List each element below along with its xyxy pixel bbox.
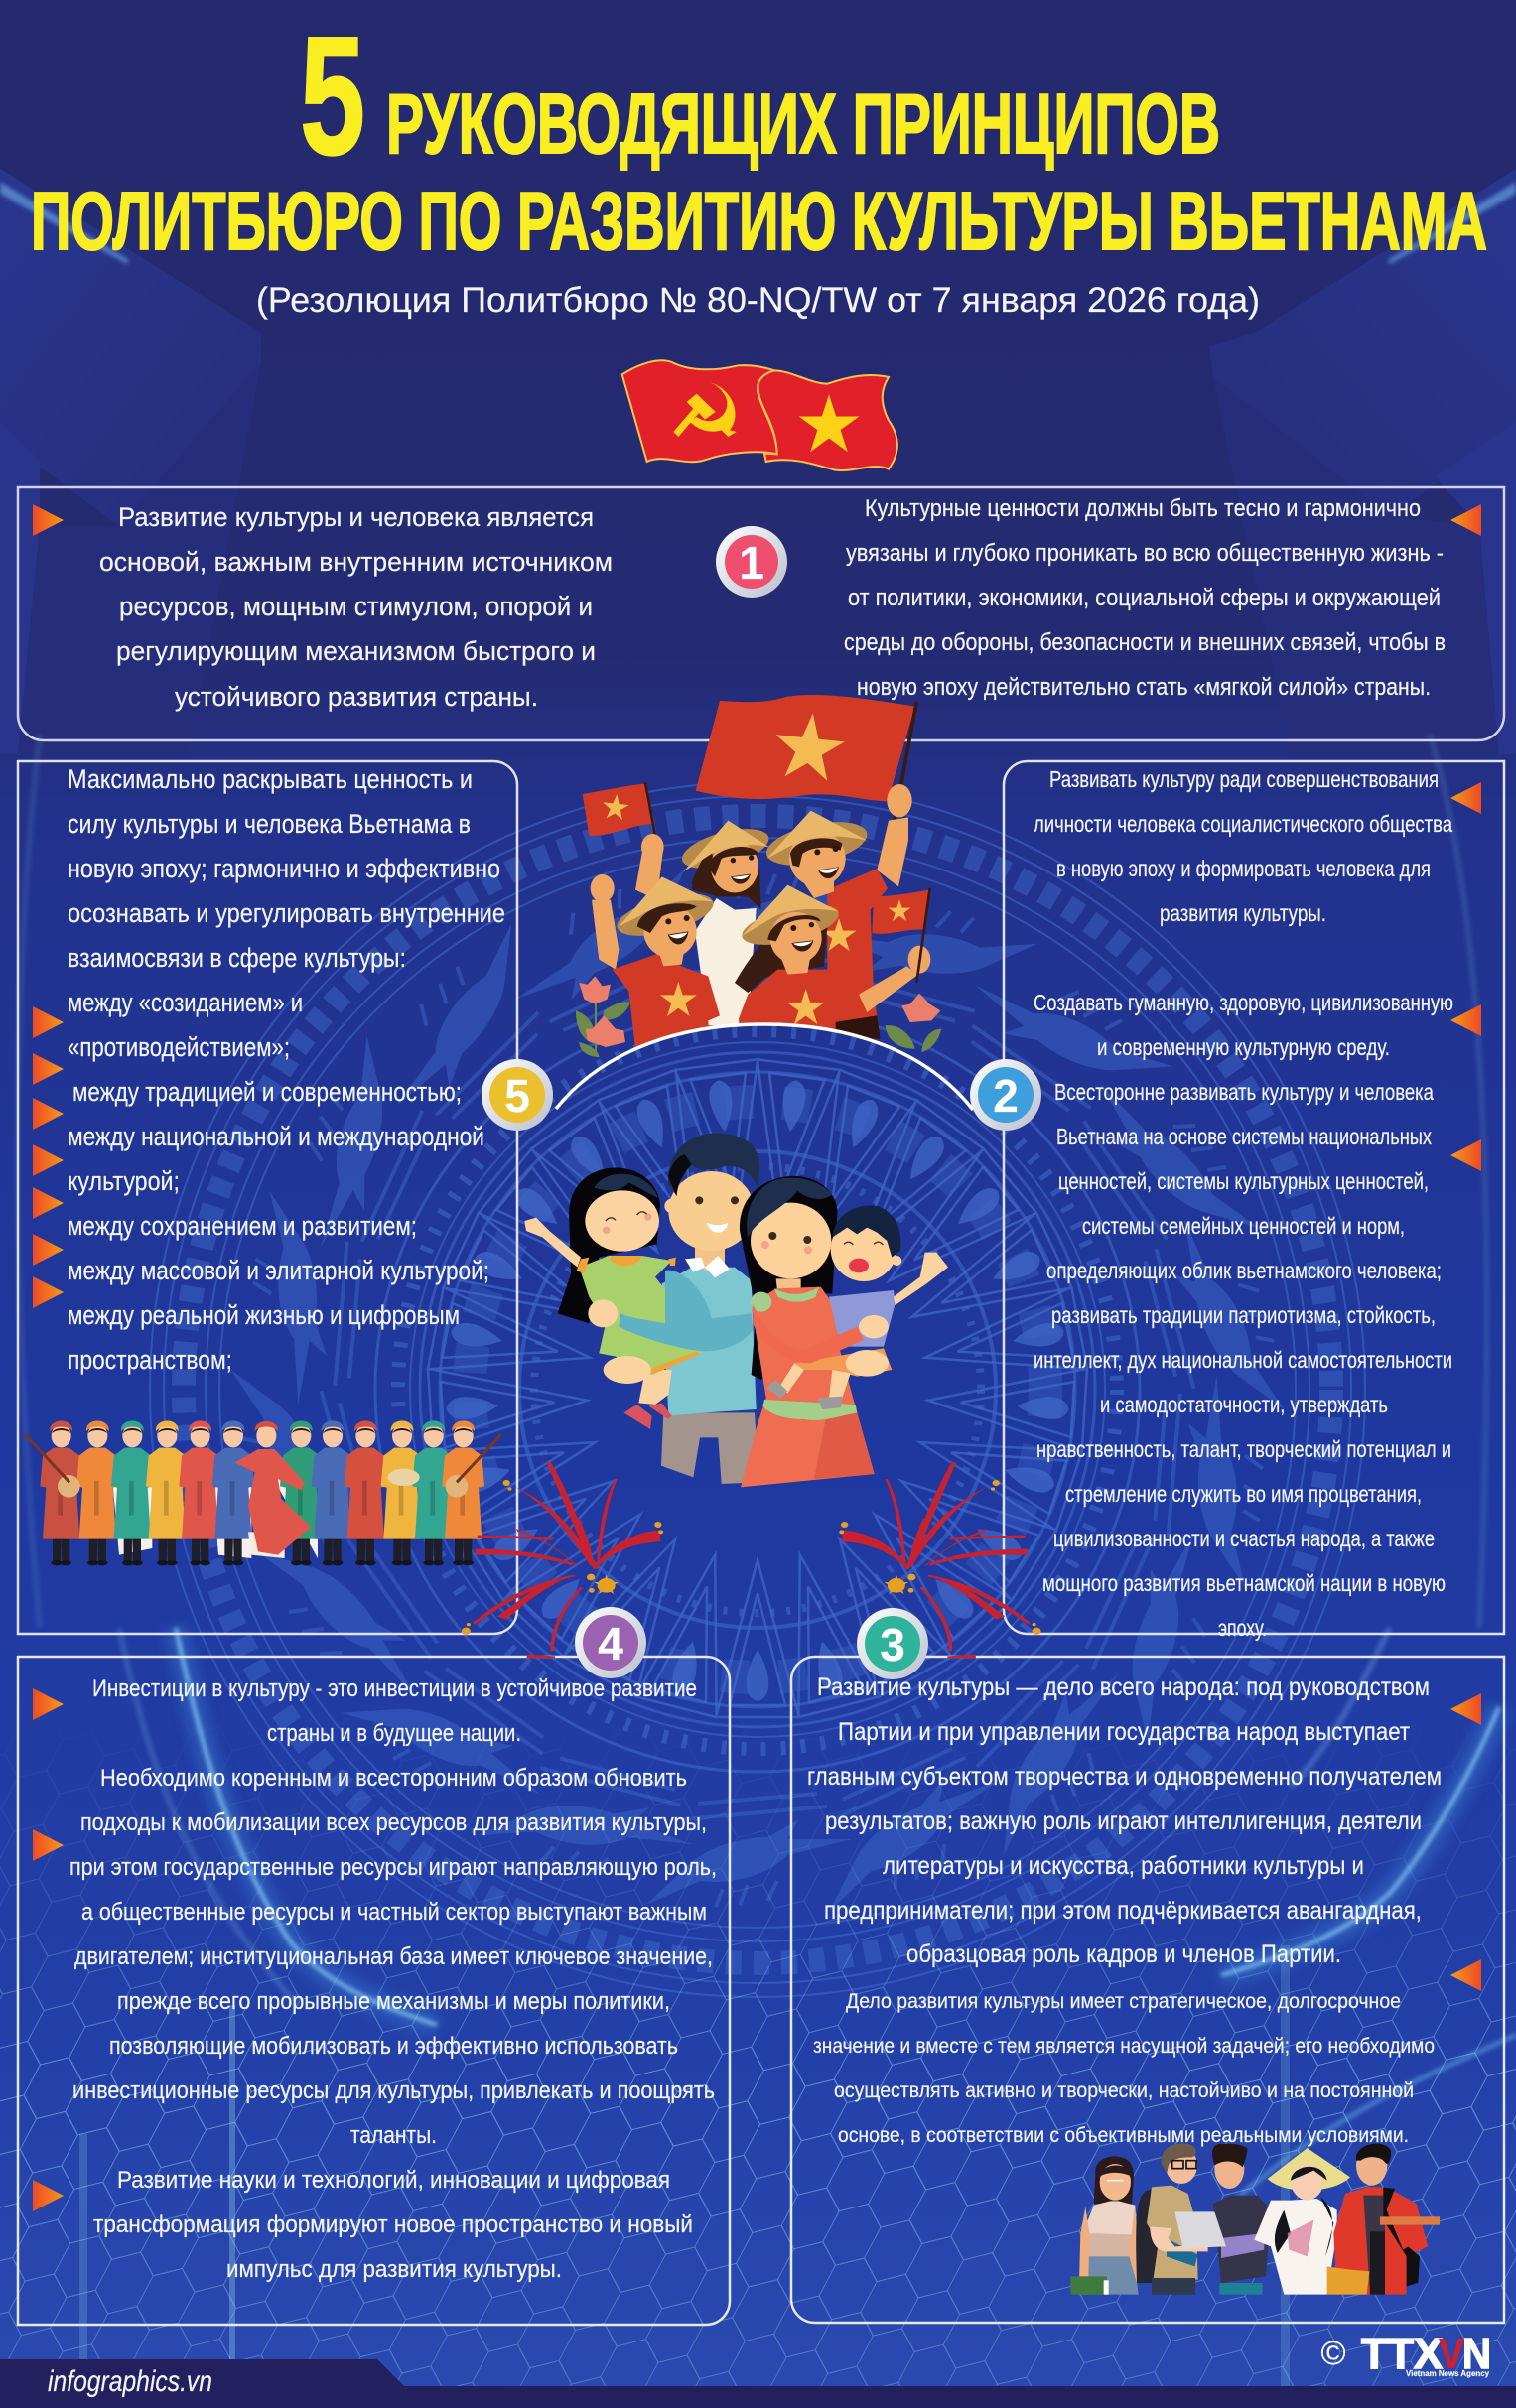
text: panel 5: новую эпоху; гармонично и эффективно bbox=[68, 854, 500, 883]
badge 2 bbox=[970, 1059, 1041, 1131]
text: panel 5: между реальной жизнью и цифровым bbox=[68, 1300, 460, 1330]
text: panel 4: а общественные ресурсы и частный сектор выступают важным bbox=[81, 1899, 707, 1926]
text: panel 5: между традицией и современностью; bbox=[72, 1077, 462, 1107]
text: panel 2 bbox=[1034, 766, 1453, 1641]
icon: small flag right bbox=[872, 888, 930, 983]
badge 4: 4 bbox=[598, 1618, 623, 1670]
text: panel 1 left: устойчивого развития страны. bbox=[175, 682, 538, 712]
panel 2: develop culture for human perfection bbox=[1004, 761, 1504, 1641]
text: panel 5 bbox=[68, 764, 505, 1375]
text: panel 5: между массовой и элитарной культурой; bbox=[68, 1256, 489, 1285]
text: panel 2: и современную культурную среду. bbox=[1097, 1034, 1390, 1060]
icon: arrow bullets bbox=[33, 1006, 64, 1308]
text: panel 2: Всесторонне развивать культуру и человека bbox=[1054, 1079, 1434, 1105]
source label: infographics.vn bbox=[48, 2365, 212, 2398]
text: panel 3 main: Развитие культуры — дело всего народа: под руководством bbox=[817, 1673, 1430, 1701]
text: panel 4: импульс для развития культуры. bbox=[226, 2256, 562, 2283]
illustration: patriotic group with flags bbox=[576, 695, 941, 1057]
panel 3: culture is the work of all people bbox=[791, 1657, 1504, 2323]
icon: arrow bullets bbox=[1450, 1693, 1481, 1991]
badge 5: 5 bbox=[504, 1070, 530, 1122]
figure: man with hat bbox=[762, 811, 888, 1039]
figure: father's arm bbox=[588, 1271, 753, 1384]
badge 2: 2 bbox=[993, 1070, 1019, 1122]
subtitle: (Резолюция Политбюро № 80-NQ/TW от 7 января 2026 года) bbox=[256, 281, 1260, 320]
panel 4: investment in culture bbox=[18, 1657, 730, 2325]
decorative Dong Son drum bbox=[150, 782, 1365, 1997]
panel 1: culture and people as foundation bbox=[18, 487, 1504, 740]
illustration: performers in traditional dress bbox=[25, 1420, 501, 1565]
logo: TTXVN: Vietnam News Agency bbox=[1406, 2368, 1489, 2378]
text: panel 4: позволяющие мобилизовать и эффективно использовать bbox=[109, 2033, 678, 2060]
illustration: fireworks bbox=[462, 1462, 1041, 1658]
icon: small flag left bbox=[583, 782, 661, 867]
text: panel 2: в новую эпоху и формировать человека для bbox=[1056, 856, 1431, 881]
text: panel 5: между сохранением и развитием; bbox=[68, 1211, 417, 1241]
text: panel 1 right bbox=[844, 495, 1446, 701]
text: panel 2: эпоху. bbox=[1218, 1615, 1267, 1641]
title bbox=[31, 2, 1487, 267]
text: panel 5: между «созиданием» и bbox=[68, 988, 303, 1017]
illustration: young people group bbox=[1070, 2143, 1440, 2295]
icon: arrow bullets bbox=[33, 1688, 64, 2211]
figure: father bbox=[661, 1134, 759, 1484]
text: panel 5: осознавать и урегулировать внутренние bbox=[68, 898, 505, 928]
text: panel 1 right: увязаны и глубоко проникать во всю общественную жизнь - bbox=[846, 540, 1444, 567]
badge 5 bbox=[482, 1059, 553, 1131]
logo: TTXVN: TTX bbox=[1361, 2330, 1443, 2378]
figure: daughter bbox=[524, 1168, 702, 1429]
figure: boy with hat bbox=[591, 874, 720, 1049]
text: panel 3 main: литературы и искусства, работники культуры и bbox=[883, 1852, 1364, 1880]
badge 4 bbox=[575, 1607, 646, 1678]
text: panel 3 secondary: осуществлять активно и творчески, настойчиво и на постоянной bbox=[834, 2078, 1414, 2102]
text: panel 1 right: среды до обороны, безопасности и внешних связей, чтобы в bbox=[844, 629, 1446, 656]
badge 1 bbox=[716, 526, 787, 598]
illustration: family bbox=[524, 1134, 948, 1487]
text: panel 1 left: ресурсов, мощным стимулом, опорой и bbox=[119, 592, 593, 621]
text: panel 5: «противодействием»; bbox=[68, 1032, 290, 1062]
icon: large flag bbox=[696, 695, 916, 834]
title: 5 bbox=[300, 2, 365, 191]
text: panel 2: ценностей, системы культурных ценностей, bbox=[1058, 1168, 1429, 1194]
text: panel 1 right: Культурные ценности должны быть тесно и гармонично bbox=[865, 495, 1421, 522]
text: panel 5: Максимально раскрывать ценность и bbox=[68, 764, 473, 794]
text: panel 4: Инвестиции в культуру - это инвестиции в устойчивое развитие bbox=[92, 1675, 697, 1702]
text: panel 4: таланты. bbox=[350, 2122, 437, 2149]
figure: son bbox=[753, 1205, 948, 1409]
text: panel 1 left: Развитие культуры и человека является bbox=[118, 502, 594, 532]
icon: lotus flowers bbox=[576, 976, 941, 1057]
badge 1: 1 bbox=[739, 537, 764, 589]
text: panel 3 main: образцовая роль кадров и членов Партии. bbox=[906, 1940, 1341, 1968]
panel 5: maximise value of culture bbox=[18, 761, 517, 1634]
text: panel 4: трансформация формируют новое пространство и новый bbox=[93, 2211, 693, 2238]
text: panel 2: системы семейных ценностей и норм, bbox=[1082, 1213, 1405, 1239]
figure: girl with hat bbox=[735, 885, 931, 1029]
figure: woman in white bbox=[678, 821, 772, 1025]
text: panel 3 secondary: основе, в соответствии с объективными реальными условиями. bbox=[838, 2123, 1409, 2147]
text: panel 2: развивать традиции патриотизма, стойкость, bbox=[1051, 1302, 1436, 1328]
text: panel 4 bbox=[69, 1675, 717, 2283]
text: panel 1 right: новую эпоху действительно стать «мягкой силой» страны. bbox=[857, 674, 1431, 701]
logo: TTXVN bbox=[1320, 2330, 1491, 2378]
text: panel 5: культурой; bbox=[68, 1166, 180, 1196]
text: panel 2: Вьетнама на основе системы национальных bbox=[1056, 1124, 1432, 1149]
text: panel 1 right: от политики, экономики, социальной сферы и окружающей bbox=[848, 585, 1441, 611]
icon: arrow bullets bbox=[1450, 782, 1481, 1171]
text: panel 2: развития культуры. bbox=[1160, 900, 1326, 926]
text: panel 4: двигателем; институциональная база имеет ключевое значение, bbox=[74, 1943, 713, 1970]
icon: party and national flags bbox=[622, 360, 897, 470]
logo: TTXVN: © bbox=[1320, 2335, 1346, 2372]
text: panel 2: стремление служить во имя процветания, bbox=[1065, 1481, 1422, 1507]
text: panel 5: силу культуры и человека Вьетнама в bbox=[68, 809, 471, 839]
text: panel 3 secondary: Дело развития культуры имеет стратегическое, долгосрочное bbox=[846, 1989, 1401, 2013]
text: panel 4: Необходимо коренным и всесторонним образом обновить bbox=[100, 1765, 687, 1792]
text: panel 1 left: основой, важным внутренним источником bbox=[99, 547, 613, 577]
text: panel 3 main: Партии и при управлении государства народ выступает bbox=[838, 1718, 1410, 1746]
footer band bbox=[0, 2359, 1516, 2408]
text: panel 3 secondary: значение и вместе с тем является насущной задачей; его необходимо bbox=[813, 2034, 1435, 2058]
decorative dome arc bbox=[556, 1024, 973, 1110]
text: panel 4: инвестиционные ресурсы для культуры, привлекать и поощрять bbox=[72, 2077, 715, 2104]
text: panel 3 main: результатов; важную роль играют интеллигенция, деятели bbox=[825, 1807, 1422, 1835]
badge 3 bbox=[857, 1608, 928, 1679]
text: panel 4: подходы к мобилизации всех ресурсов для развития культуры, bbox=[80, 1809, 707, 1836]
text: panel 5: пространством; bbox=[68, 1345, 232, 1375]
text: panel 5: между национальной и международной bbox=[68, 1122, 484, 1151]
text: panel 4: прежде всего прорывные механизмы и меры политики, bbox=[117, 1988, 670, 2015]
logo: TTXVN: V bbox=[1439, 2330, 1465, 2378]
text: panel 5: взаимосвязи в сфере культуры: bbox=[68, 943, 406, 973]
text: panel 3 main bbox=[807, 1673, 1442, 1968]
badge 3: 3 bbox=[880, 1619, 905, 1671]
text: panel 1 left: регулирующим механизмом быстрого и bbox=[116, 636, 596, 666]
text: panel 3 secondary bbox=[813, 1989, 1435, 2147]
icon: arrow bullets bbox=[33, 504, 1481, 536]
text: panel 2: и самодостаточности, утверждать bbox=[1100, 1392, 1388, 1417]
text: panel 3 main: предприниматели; при этом подчёркивается авангардная, bbox=[824, 1897, 1422, 1925]
text: panel 4: страны и в будущее нации. bbox=[267, 1720, 521, 1747]
logo: TTXVN: N bbox=[1462, 2330, 1491, 2378]
figure: mother bbox=[740, 1176, 875, 1487]
text: panel 4: при этом государственные ресурсы играют направляющую роль, bbox=[69, 1854, 717, 1881]
text: panel 1 left bbox=[99, 502, 613, 712]
text: panel 3 main: главным субъектом творчества и одновременно получателем bbox=[807, 1763, 1442, 1791]
text: panel 4: Развитие науки и технологий, инновации и цифровая bbox=[117, 2167, 670, 2194]
